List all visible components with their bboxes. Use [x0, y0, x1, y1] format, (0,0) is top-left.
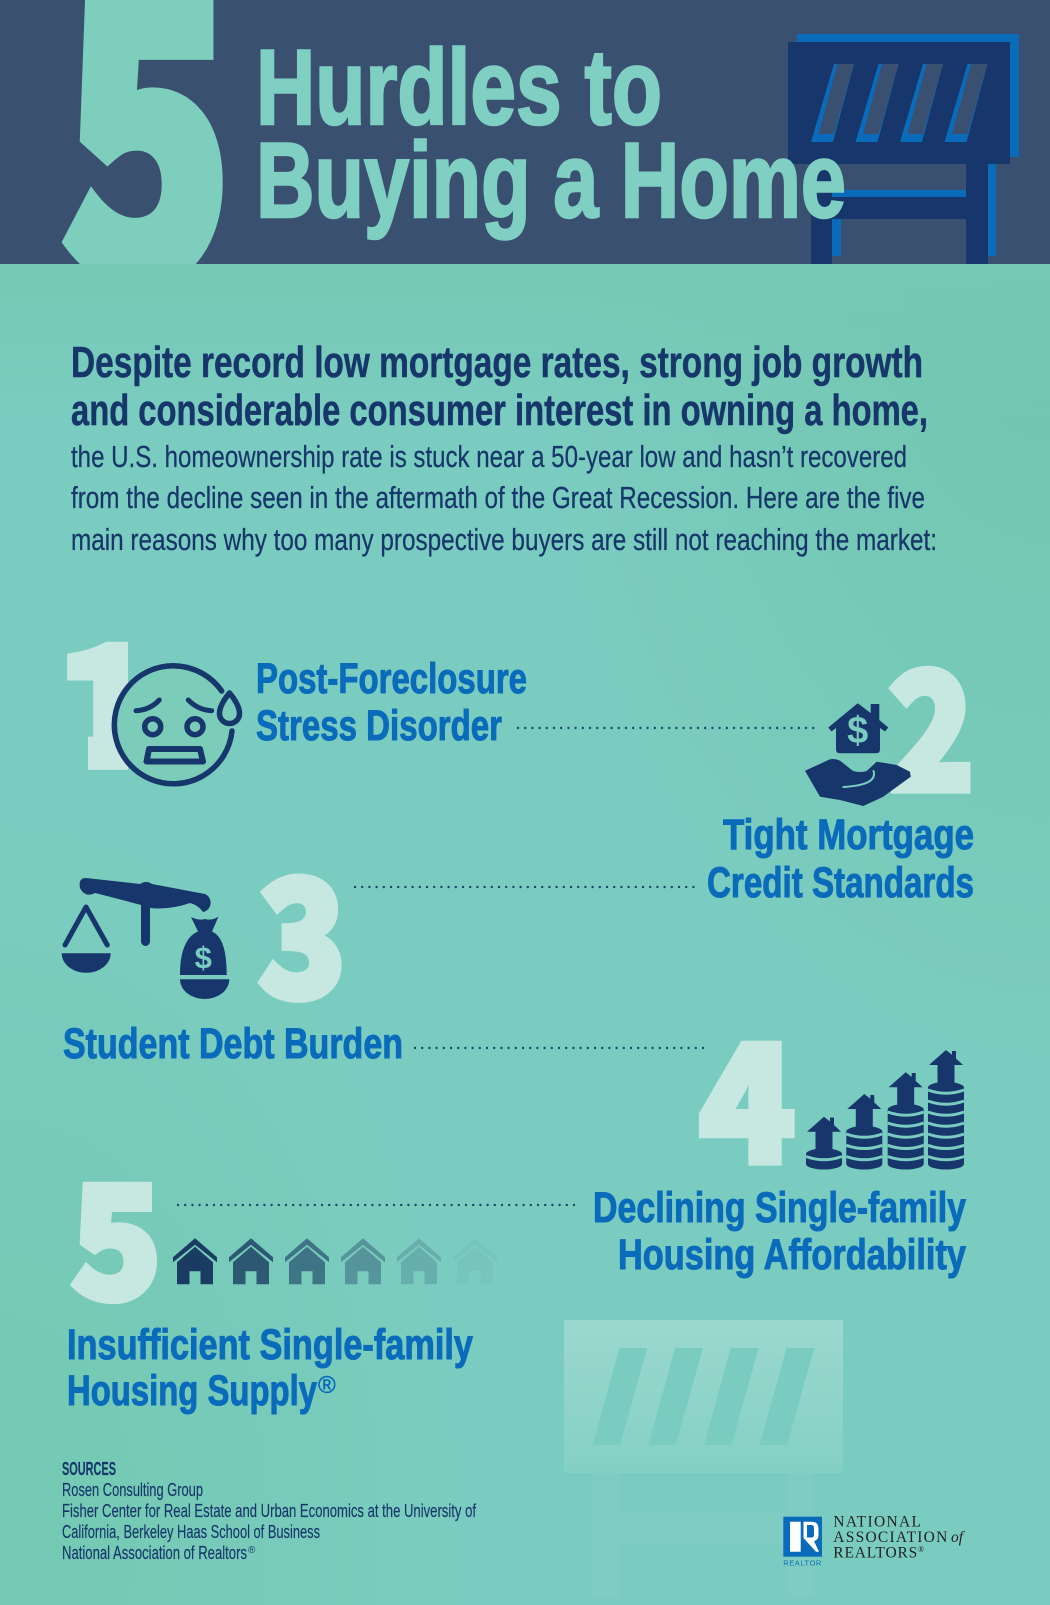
title: Buying a Home: [256, 120, 846, 240]
number 3: 3: [258, 810, 346, 1044]
text block: sources: Fisher Center for Real Estate and Urban Economics at the University of: [62, 1500, 477, 1521]
icon: rising houses on coin stacks: [806, 1050, 964, 1170]
icon: watermark hurdle: [564, 1320, 843, 1597]
panel: hurdle 2: [707, 602, 974, 907]
number 2: 2: [888, 602, 974, 838]
text block: intro: [71, 339, 937, 557]
title: [256, 27, 846, 240]
icon: hurdle barrier in header: [788, 34, 1019, 264]
text block: sources: [62, 1458, 477, 1563]
text block: sources: Rosen Consulting Group: [62, 1479, 203, 1500]
number 4: 4: [699, 975, 795, 1210]
panel: hurdle 5: [67, 1118, 497, 1415]
label: Student Debt Burden: [63, 1020, 403, 1068]
number 1: 1: [54, 576, 170, 812]
logo: National Association of Realtors: NATIONAL: [833, 1514, 921, 1531]
text block: sources: ®: [248, 1545, 256, 1556]
logo: National Association of Realtors: ASSOCIATION: [833, 1529, 947, 1546]
icon: worried sweating face: [114, 666, 240, 786]
label: Post-Foreclosure: [256, 655, 527, 703]
panel: header: [0, 0, 1050, 264]
logo: National Association of Realtors: of: [951, 1529, 966, 1546]
text block: sources: National Association of Realtors: [62, 1542, 247, 1563]
logo: National Association of Realtors: REALTOR: [783, 1558, 822, 1568]
logo: National Association of Realtors: REALTORS: [833, 1544, 917, 1561]
logo: National Association of Realtors: ®: [918, 1545, 924, 1554]
icon: house with dollar over hand: [805, 703, 911, 806]
icon: house with dollar over hand: $: [847, 710, 868, 752]
label: Stress Disorder: [256, 702, 502, 750]
icon: row of fading houses: [173, 1238, 497, 1284]
label: Tight Mortgage: [723, 811, 974, 859]
number 5: 5: [70, 1118, 162, 1344]
title: Hurdles to: [256, 27, 662, 147]
icon: scale with money bag: $: [195, 940, 212, 975]
label: Housing Affordability: [618, 1231, 966, 1279]
panel: hurdle 1: [67, 642, 526, 786]
label: [593, 1184, 966, 1279]
label: [67, 1321, 473, 1415]
icon: scale with money bag: [62, 878, 229, 999]
panel: hurdle 3: [62, 810, 403, 1068]
label: Credit Standards: [707, 859, 974, 907]
text block: sources: California, Berkeley Haas School of Business: [62, 1521, 320, 1542]
label: [256, 655, 527, 750]
panel: hurdle 4: [593, 975, 966, 1279]
label: Housing Supply: [67, 1367, 317, 1415]
text block: sources: SOURCES: [62, 1458, 116, 1479]
label: Insufficient Single-family: [67, 1321, 473, 1369]
logo: National Association of Realtors: [783, 1514, 966, 1568]
label: [707, 811, 974, 907]
label: ®: [318, 1372, 336, 1399]
